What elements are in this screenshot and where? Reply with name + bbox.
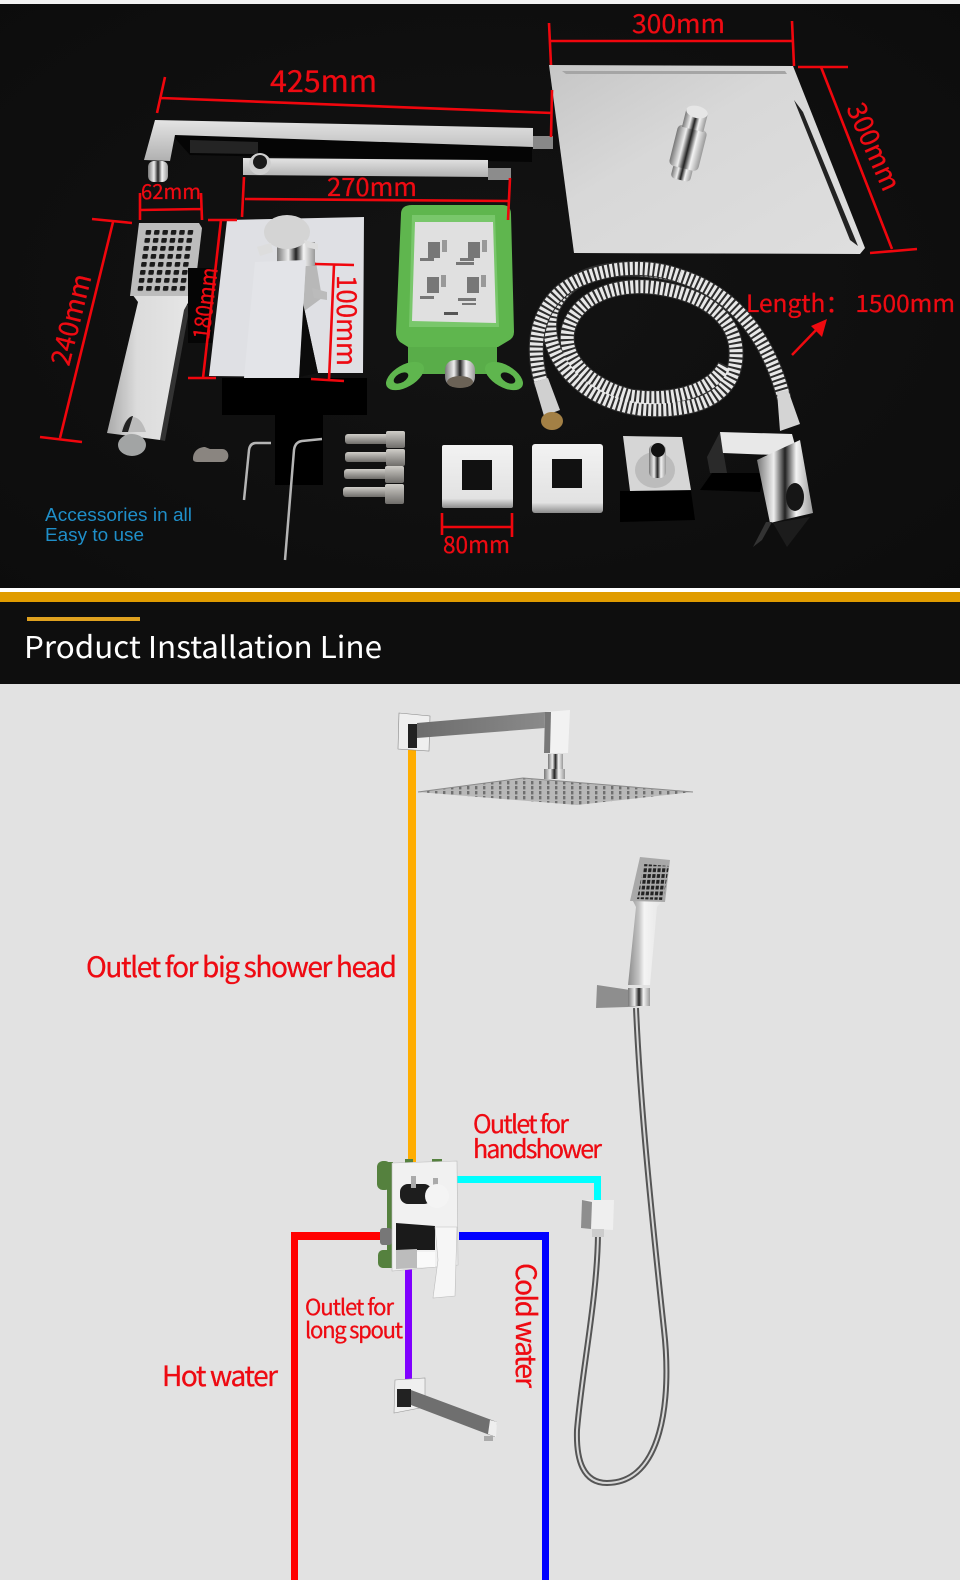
label: outlet for long spout: long spout bbox=[305, 1313, 403, 1345]
dimension: 300mm top: 300mm bbox=[632, 4, 725, 41]
label: outlet for handshower: Outlet for bbox=[473, 1105, 569, 1141]
caption: accessories: Easy to use bbox=[45, 524, 144, 545]
dimension: 180mm: 180mm bbox=[182, 265, 225, 341]
heading: Product Installation Line bbox=[24, 623, 382, 667]
top white strip bbox=[0, 0, 960, 4]
label: outlet for big shower head: Outlet for big shower head bbox=[86, 946, 397, 986]
panel: installation diagram bbox=[0, 684, 960, 1580]
callout: hose length: Length： 1500mm bbox=[746, 284, 955, 319]
dimension: 425mm bbox=[157, 57, 552, 137]
dimension: 240mm bbox=[39, 219, 132, 442]
callout: hose length bbox=[746, 284, 955, 355]
part: green valve box bbox=[381, 205, 528, 396]
dimension: 270mm bbox=[242, 168, 510, 220]
black shadows behind valve bbox=[222, 378, 367, 485]
fixture: overhead shower arm bbox=[398, 710, 570, 779]
dimension: 300mm side bbox=[798, 67, 917, 253]
label: outlet for long spout: Outlet for bbox=[305, 1290, 394, 1322]
caption: accessories bbox=[45, 504, 192, 545]
dimension: 270mm: 270mm bbox=[327, 168, 417, 204]
fixture: rain shower head bbox=[418, 778, 693, 805]
label: hot water: Hot water bbox=[162, 1355, 278, 1395]
label: outlet for handshower: handshower bbox=[473, 1130, 602, 1166]
part: flexible hose coil bbox=[534, 268, 800, 431]
fixture: hand shower hose bbox=[577, 1008, 666, 1483]
pipe: red hot water bbox=[291, 1232, 382, 1580]
part: escutcheon right bbox=[532, 444, 603, 513]
dimension: 180mm bbox=[182, 220, 237, 378]
dimension: 62mm: 62mm bbox=[141, 176, 201, 205]
panel: product parts with dimensions bbox=[0, 4, 960, 588]
fixture: hand shower bracket bbox=[596, 985, 650, 1008]
pipe: cyan outlet for handshower bbox=[457, 1176, 601, 1201]
part: hex keys bbox=[244, 439, 322, 560]
dimension: 100mm bbox=[311, 264, 368, 381]
dimension: 240mm: 240mm bbox=[39, 269, 99, 369]
section header band bbox=[0, 602, 960, 684]
part: short shower arm 270mm bbox=[243, 153, 511, 180]
caption: accessories: Accessories in all bbox=[45, 504, 192, 525]
label: outlet for handshower bbox=[473, 1105, 602, 1166]
dimension: 300mm top bbox=[549, 4, 794, 66]
dimension: 100mm: 100mm bbox=[329, 275, 368, 366]
part: small cover bbox=[193, 447, 228, 462]
pipe: blue cold water bbox=[459, 1232, 549, 1580]
fixture: mixer face plate bbox=[392, 1161, 458, 1298]
fixture: bath spout bbox=[394, 1378, 497, 1441]
pipe: orange outlet for big shower head bbox=[408, 748, 416, 1162]
white separator bbox=[0, 588, 960, 592]
fixture: green rough-in valve back bbox=[377, 1159, 442, 1268]
dimension: 62mm bbox=[140, 176, 202, 220]
part: four expansion bolts bbox=[343, 431, 405, 504]
label: cold water: Cold water bbox=[507, 1263, 547, 1388]
fixture: handshower wall elbow bbox=[581, 1200, 614, 1237]
label: outlet for long spout bbox=[305, 1290, 403, 1345]
dimension: 300mm side: 300mm bbox=[839, 95, 912, 196]
dimension: 80mm: 80mm bbox=[443, 526, 510, 560]
part: hand shower bbox=[107, 223, 202, 456]
pipe: purple outlet for long spout bbox=[405, 1268, 412, 1380]
fixture: hand shower bbox=[628, 857, 670, 985]
part: escutcheon left bbox=[442, 445, 513, 508]
gold header stripe bbox=[0, 592, 960, 602]
part: square shower head bbox=[549, 65, 865, 254]
dimension: 425mm: 425mm bbox=[270, 57, 377, 101]
part: mixer valve face plate bbox=[209, 215, 364, 378]
part: long shower arm 425mm bbox=[144, 120, 553, 182]
part: wall elbow bbox=[620, 436, 695, 522]
part: hand shower holder bbox=[700, 432, 813, 547]
